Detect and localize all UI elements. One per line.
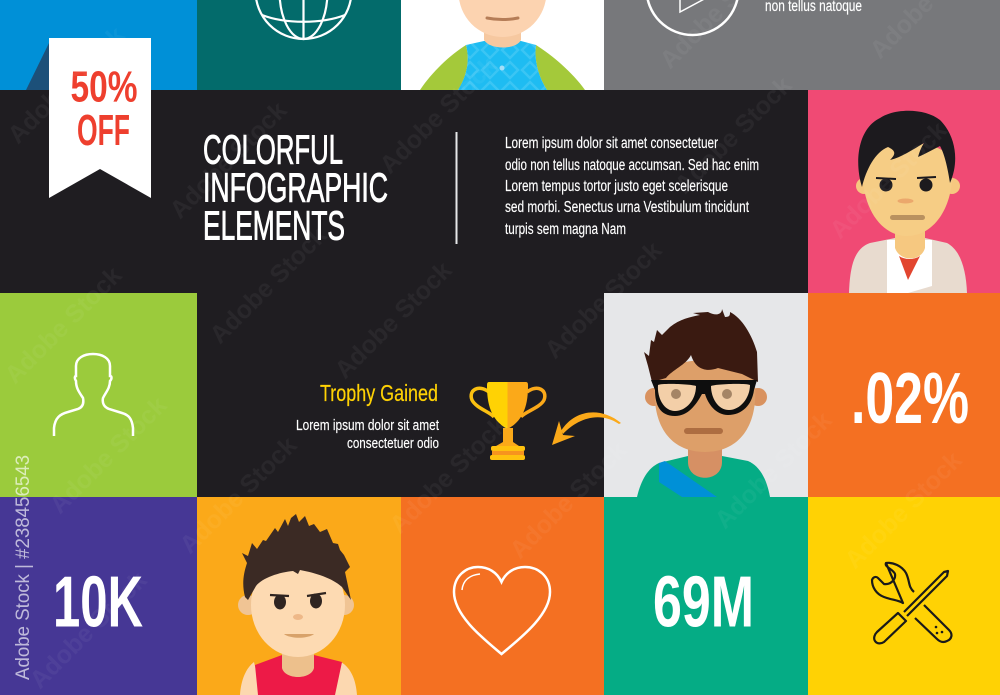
watermark: diagonal stock text: Adobe Stock	[0, 261, 127, 389]
character: man in white shirt	[849, 111, 967, 293]
watermark: diagonal stock text: Adobe Stock	[504, 436, 632, 564]
text: OFF: OFF	[77, 106, 130, 155]
heading: COLORFUL	[203, 126, 343, 172]
icon: heart	[454, 567, 550, 654]
heading: ELEMENTS	[203, 202, 345, 248]
panel: teal globe tile	[197, 0, 401, 90]
icon: play button	[646, 0, 738, 35]
panel: light gray character tile	[552, 293, 808, 497]
icon: user outline	[54, 354, 133, 436]
watermark: diagonal stock text: Adobe Stock	[24, 566, 152, 694]
watermark: vertical stock id: Adobe Stock | #238456543	[13, 455, 34, 680]
character: boy with glasses	[637, 309, 770, 497]
icon: trophy	[471, 382, 545, 460]
text: trophy caption: consectetuer odio	[347, 436, 439, 452]
watermark: diagonal stock text: Adobe Stock	[374, 51, 502, 179]
character: boy in blue vest	[420, 0, 585, 90]
panel: purple stat tile	[0, 497, 197, 695]
arrow: curved to trophy	[552, 412, 621, 445]
panel: white tile with character	[401, 0, 604, 90]
text block: lorem ipsum	[505, 135, 759, 238]
watermark: diagonal stock text: Adobe Stock	[839, 446, 967, 574]
watermark: diagonal stock text: Adobe Stock	[824, 116, 952, 244]
watermark: diagonal stock text: Adobe Stock	[539, 236, 667, 364]
icon: wrench and screwdriver	[872, 563, 951, 643]
watermark: diagonal stock text: Adobe Stock	[329, 256, 457, 384]
watermark: diagonal stock text: Adobe Stock	[669, 71, 797, 199]
panel: green stat tile	[604, 497, 808, 695]
stat: 69M: 69M	[653, 562, 754, 642]
watermark: diagonal stock text: Adobe Stock	[384, 411, 512, 539]
text block: lorem ipsum: odio non tellus natoque accumsan. Sed hac enim	[505, 157, 759, 174]
text block: lorem ipsum: sed morbi. Senectus urna Vestibulum tincidunt	[505, 199, 750, 216]
watermark: diagonal stock text: Adobe Stock	[164, 96, 292, 224]
panel: gray play tile	[604, 0, 1000, 90]
panel: dark trophy area	[197, 293, 604, 497]
text: trophy caption: Lorem ipsum dolor sit amet	[296, 418, 439, 434]
panel: dark header band	[0, 38, 808, 293]
panel: orange stat tile	[808, 293, 1000, 497]
text: trophy caption	[296, 418, 439, 452]
text block: lorem ipsum: turpis sem magna Nam	[505, 221, 626, 238]
character: spiky hair boy	[238, 514, 357, 695]
icon dots	[935, 626, 943, 634]
heading: trophy gained: Trophy Gained	[320, 380, 438, 406]
text block: lorem ipsum: Lorem ipsum dolor sit amet consectetuer	[505, 135, 718, 152]
ribbon: 50% off	[49, 38, 151, 198]
text block: lorem ipsum: Lorem tempus tortor justo eget scelerisque	[505, 178, 728, 195]
watermark: diagonal stock text: Adobe Stock	[204, 221, 332, 349]
panel: blue tile	[0, 0, 197, 90]
ribbon shadow	[26, 43, 49, 90]
panel: green user tile	[0, 293, 197, 497]
panel: pink character tile	[808, 90, 1000, 293]
icon: globe	[256, 0, 352, 39]
watermark: diagonal stock text: Adobe Stock	[2, 21, 130, 149]
watermark: diagonal stock text: Adobe Stock	[709, 406, 837, 534]
heading: INFOGRAPHIC	[203, 164, 388, 210]
watermark: diagonal stock text: Adobe Stock	[174, 431, 302, 559]
stat: 10K: 10K	[53, 562, 143, 642]
panel: orange heart tile	[401, 497, 604, 695]
watermark: diagonal stock text: Adobe Stock	[44, 391, 172, 519]
panel: yellow tools tile	[808, 497, 1000, 695]
text: 50%: 50%	[70, 62, 138, 112]
panel: amber character tile	[197, 497, 401, 695]
heading	[203, 126, 388, 248]
